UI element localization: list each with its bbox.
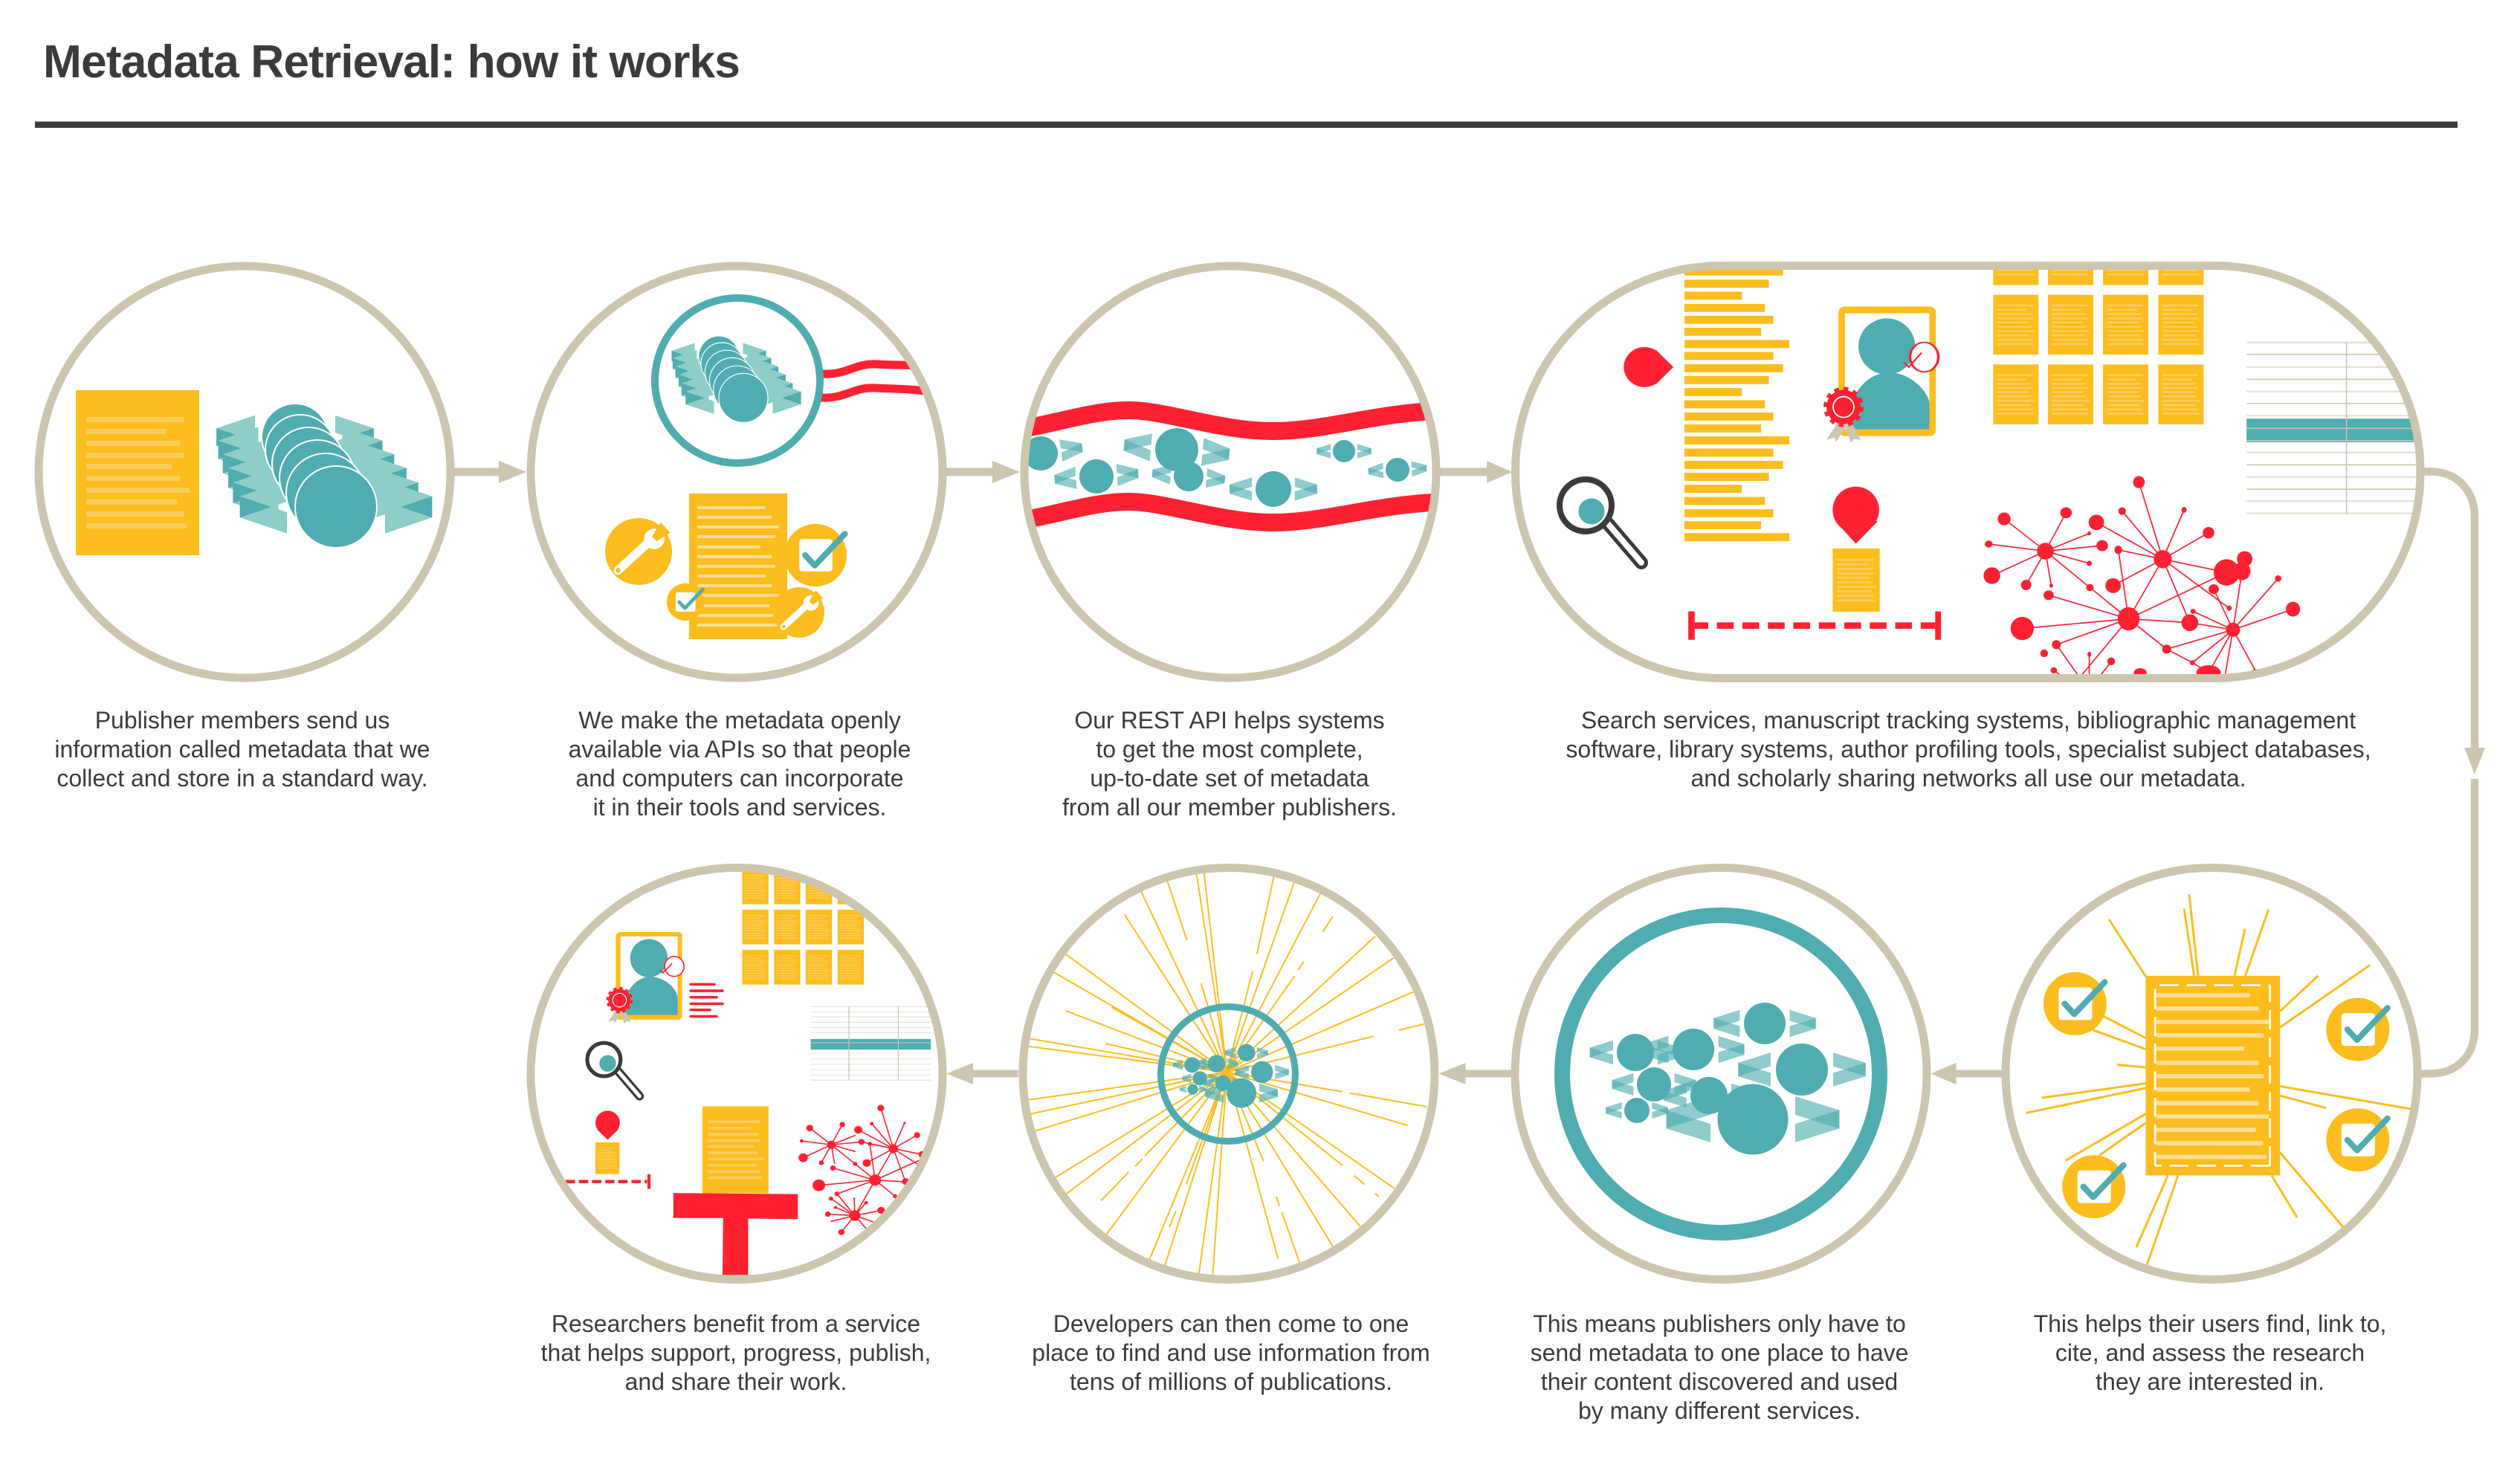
arrow 5 to 6 (1931, 1063, 2002, 1084)
award badge (1826, 389, 1861, 443)
caption step 2: We make the metadata openly (578, 707, 901, 734)
caption step 8: that helps support, progress, publish, (541, 1339, 931, 1366)
arrow 7 to 8 (946, 1063, 1018, 1084)
small cluster (1173, 1044, 1289, 1108)
central document (2145, 976, 2280, 1175)
caption step 6: This means publishers only have to (1533, 1310, 1906, 1337)
panel: step 5 users find research (2006, 868, 2417, 1280)
document grid (1993, 270, 2203, 424)
teal ring (1563, 916, 1879, 1232)
red desk (673, 1193, 798, 1275)
panel: step 7 developers (1023, 868, 1435, 1280)
teal ring (1161, 1006, 1295, 1142)
ring (1515, 868, 1927, 1280)
ring (531, 266, 943, 678)
caption step 8: Researchers benefit from a service (552, 1310, 920, 1337)
arrow 1 to 2 (454, 461, 526, 483)
panel: step 1 publisher metadata (39, 266, 450, 678)
magnifier (1560, 479, 1641, 563)
ring (1023, 868, 1435, 1280)
caption step 7: place to find and use information from (1032, 1339, 1430, 1366)
portrait (616, 932, 684, 1020)
metadata stream (997, 410, 1457, 524)
metadata stack (216, 404, 432, 548)
network graph (798, 1104, 926, 1235)
caption step 5: they are interested in. (2096, 1368, 2324, 1395)
dashed range (566, 1174, 650, 1189)
magnifier (587, 1043, 639, 1096)
connector from step 4 to step 5 (2417, 471, 2485, 1073)
caption step 3: from all our member publishers. (1062, 794, 1397, 821)
wrench icon (605, 518, 672, 585)
caption step 7: tens of millions of publications. (1070, 1368, 1392, 1395)
caption step 6: their content discovered and used (1541, 1368, 1898, 1395)
caption step 7: Developers can then come to one (1053, 1310, 1409, 1337)
panel: step 6 one place (1515, 868, 1927, 1280)
metadata cluster (1590, 1003, 1866, 1155)
check icon (784, 524, 847, 586)
caption step 4: Search services, manuscript tracking systems, bibliographic management (1581, 707, 2356, 734)
caption step 2: available via APIs so that people (569, 736, 911, 763)
small document (1832, 549, 1880, 612)
radiating lines (1028, 873, 1427, 1275)
arrow 2 to 3 (946, 461, 1020, 483)
caption step 1: information called metadata that we (54, 736, 430, 763)
portrait (1838, 306, 1939, 436)
caption step 6: send metadata to one place to have (1531, 1339, 1908, 1366)
caption step 5: cite, and assess the research (2055, 1339, 2365, 1366)
document (76, 390, 199, 555)
red pin (595, 1110, 620, 1140)
document grid (742, 870, 864, 985)
panel: step 4 services (1515, 225, 2425, 680)
award badge (607, 989, 632, 1023)
caption step 2: it in their tools and services. (593, 794, 886, 821)
rays (2026, 894, 2411, 1264)
table (2246, 343, 2425, 514)
ring (1024, 266, 1436, 678)
red pin sideways (1624, 347, 1673, 387)
dashed range (1688, 612, 1941, 640)
network graph (1983, 476, 2300, 680)
pill outline (1515, 266, 2420, 678)
check icons (2044, 972, 2389, 1218)
caption step 1: collect and store in a standard way. (56, 765, 428, 792)
yellow list bars (1684, 268, 1789, 541)
red pipes (821, 364, 944, 398)
title: Metadata Retrieval: how it works (43, 36, 740, 88)
large document (702, 1106, 769, 1193)
ring (2006, 868, 2417, 1280)
panel: step 8 researchers (531, 868, 943, 1280)
arrow 6 to 7 (1439, 1063, 1511, 1084)
small document (595, 1142, 619, 1174)
caption step 4: software, library systems, author profiling tools, specialist subject databases, (1566, 736, 2371, 763)
red text lines (691, 984, 723, 1016)
caption step 5: This helps their users find, link to, (2034, 1310, 2386, 1337)
small metadata in ring (655, 298, 820, 463)
ring (531, 868, 943, 1280)
caption step 2: and computers can incorporate (575, 765, 904, 792)
small wrench icon (774, 587, 824, 638)
caption step 6: by many different services. (1578, 1397, 1861, 1424)
arrow 3 to 4 (1440, 461, 1512, 483)
caption step 3: Our REST API helps systems (1074, 707, 1385, 734)
panel: step 3 REST API (997, 266, 1457, 678)
ring (39, 266, 450, 678)
caption step 1: Publisher members send us (95, 707, 390, 734)
table (811, 1006, 931, 1080)
red pin down (1832, 487, 1879, 544)
panel: step 2 open APIs (531, 266, 944, 678)
small check icon (667, 583, 704, 621)
caption step 8: and share their work. (625, 1368, 847, 1395)
caption step 4: and scholarly sharing networks all use our metadata. (1690, 765, 2246, 792)
document with lines (689, 494, 787, 639)
caption step 3: to get the most complete, (1096, 736, 1363, 763)
caption step 3: up-to-date set of metadata (1090, 765, 1369, 792)
